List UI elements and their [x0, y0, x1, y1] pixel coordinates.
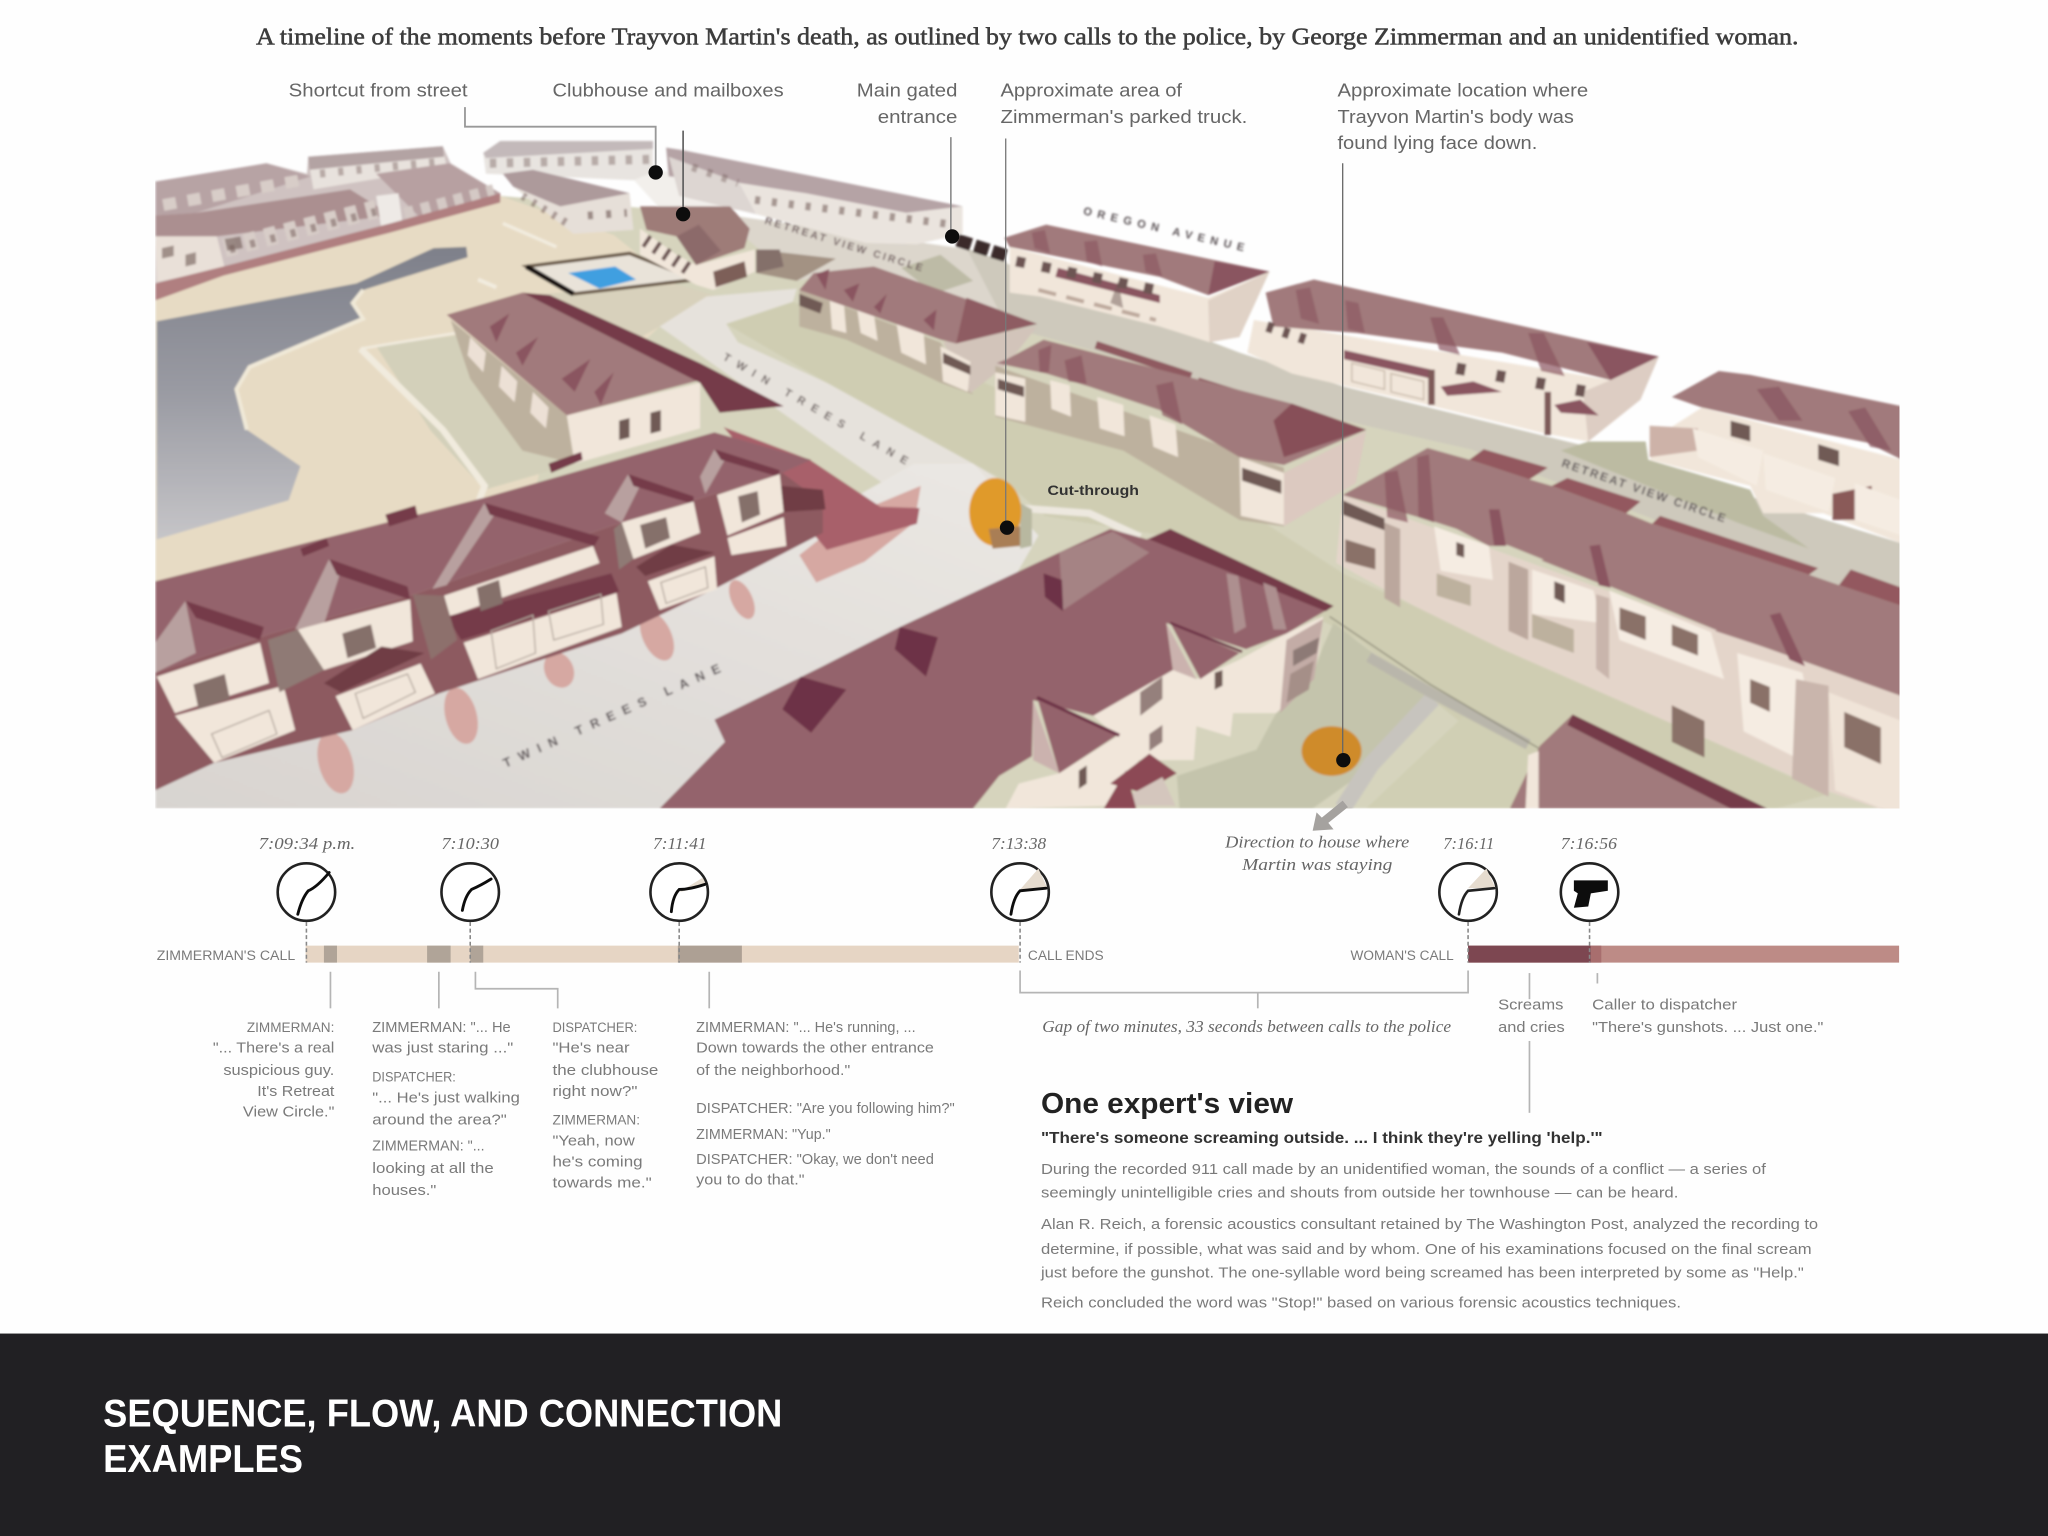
- callout: parked truck: Approximate area of: [1000, 80, 1183, 101]
- transcript column 3: DISPATCHER:: [552, 1020, 637, 1035]
- callout: main gated entrance: Main gated: [857, 80, 957, 101]
- direction note: Direction to house where: [1224, 833, 1409, 852]
- far back row near shortcut: [483, 141, 653, 234]
- timeline: [157, 833, 1899, 1199]
- transcript column 1: ZIMMERMAN:: [247, 1020, 334, 1035]
- footer band: [0, 1334, 2048, 1536]
- G white wall panels: [1434, 526, 1493, 580]
- lawn behind pool: [548, 285, 696, 336]
- title: A timeline of the moments before Trayvon Martin's death, as outlined by two calls to the police, by George Zimmerman and an unidentified woman.: [256, 23, 1799, 50]
- screams note: [1498, 997, 1565, 1036]
- quote: "There's someone screaming outside. ... I think they're yelling 'help.'": [1041, 1130, 1603, 1147]
- G porches and windows: [1343, 500, 1384, 530]
- transcript column 3: towards me.": [552, 1174, 652, 1191]
- windows and garage doors: [193, 674, 230, 709]
- body text: Alan R. Reich, a forensic acoustics consultant retained by The Washington Post, analyzed the recording to: [1041, 1216, 1818, 1233]
- icon: clock 7:16:11: [1439, 863, 1497, 921]
- callout: main gated entrance: entrance: [878, 106, 957, 127]
- transcript column 2: ZIMMERMAN: "... He: [372, 1019, 511, 1036]
- pool and frame: [526, 253, 696, 294]
- dormers: [155, 601, 196, 673]
- body text: [1040, 1161, 1818, 1311]
- transcript column 3: "Yeah, now: [552, 1132, 635, 1149]
- lake banks: [155, 196, 712, 588]
- direction note: [1224, 833, 1409, 874]
- parking strips: [1096, 345, 1902, 606]
- recessed: [268, 630, 324, 692]
- orange marker: truck area: [969, 478, 1032, 549]
- transcript column 1: View Circle.": [243, 1104, 334, 1121]
- lawn by lake: [378, 336, 543, 488]
- Twin Trees Lane road lower: [155, 464, 1038, 808]
- row: block E: [995, 340, 1366, 526]
- caller note: Caller to dispatcher: [1592, 997, 1737, 1014]
- icon: clock 7:13:38: [991, 863, 1049, 921]
- Retreat View Circle road: [967, 248, 1902, 614]
- screams note: and cries: [1498, 1019, 1565, 1036]
- transcript column 2: looking at all the: [372, 1160, 494, 1177]
- upper walls: [157, 643, 269, 713]
- big central roof block J: [660, 529, 1334, 808]
- callout: parked truck: [1000, 80, 1247, 535]
- timestamps: [259, 834, 1618, 853]
- gap note: Gap of two minutes, 33 seconds between calls to the police: [1042, 1017, 1451, 1036]
- lake: [157, 247, 468, 539]
- map street labels: TWIN TREES LANE: [721, 351, 917, 471]
- transcript column 3: "He's near: [552, 1040, 630, 1057]
- clubhouse: [640, 206, 836, 290]
- callout: main gated entrance: [857, 80, 959, 244]
- transcript column 4: you to do that.": [696, 1172, 805, 1189]
- garage walls: [175, 686, 295, 763]
- direction note: Martin was staying: [1241, 855, 1392, 874]
- arrow: direction to house: [1313, 801, 1348, 831]
- callout: parked truck: Zimmerman's parked truck.: [1000, 106, 1247, 127]
- transcript column 2: DISPATCHER:: [372, 1069, 456, 1084]
- Twin Trees Lane road upper: [660, 288, 996, 482]
- transcript column 4: [696, 1019, 955, 1189]
- row: block F2: [1247, 280, 1659, 441]
- distant houses, upper left: [155, 146, 500, 300]
- body text: Reich concluded the word was "Stop!" based on various forensic acoustics techniques.: [1041, 1294, 1681, 1311]
- J windows: [1140, 677, 1162, 716]
- transcript column 2: ZIMMERMAN: "...: [372, 1138, 485, 1155]
- timestamps: 7:09:34 p.m.: [259, 834, 355, 853]
- transcript column 2: houses.": [372, 1182, 436, 1199]
- transcript column 1: It's Retreat: [257, 1083, 335, 1100]
- transcript column 3: ZIMMERMAN:: [552, 1113, 640, 1128]
- bar labels: CALL ENDS: [1028, 948, 1104, 963]
- transcript column 2: around the area?": [372, 1112, 507, 1129]
- map callouts: [289, 80, 1588, 767]
- map street labels: TWIN TREES LANE: [501, 657, 730, 771]
- small white paths: [503, 223, 556, 247]
- cut-through label: Cut-through: [1048, 483, 1139, 498]
- timestamps: 7:11:41: [653, 834, 707, 853]
- transcript column 1: suspicious guy.: [223, 1062, 334, 1079]
- map street labels: RETREAT VIEW CIRCLE: [763, 216, 926, 275]
- icon: clock 7:10:30: [441, 863, 499, 921]
- screams note: Screams: [1498, 997, 1563, 1014]
- footer title: EXAMPLES: [103, 1438, 303, 1481]
- clock stems: [306, 922, 1590, 963]
- G dormers: [1445, 509, 1506, 546]
- garage roofs: [324, 647, 424, 692]
- panel: one expert's view: [1040, 1088, 1818, 1311]
- icon: clock 7:09:34: [278, 863, 335, 921]
- icon: gun: [1561, 863, 1618, 921]
- row: block F1: [1004, 225, 1270, 342]
- transcript column 2: [371, 1019, 520, 1199]
- orange marker: body location: [1302, 726, 1362, 776]
- footer title: [103, 1392, 782, 1481]
- caller note: [1592, 997, 1823, 1036]
- map street labels: OREGON AVENUE: [1082, 205, 1251, 255]
- transcript column 4: ZIMMERMAN: "Yup.": [696, 1126, 831, 1143]
- gable two: [1033, 700, 1059, 773]
- transcript column 4: DISPATCHER: "Are you following him?": [696, 1100, 955, 1117]
- callout: body location: [1336, 80, 1588, 767]
- transcript column 4: of the neighborhood.": [696, 1062, 850, 1079]
- row: block D: [799, 266, 1037, 394]
- transcript column 3: he's coming: [552, 1153, 643, 1170]
- transcript column 1: [213, 1020, 335, 1121]
- bar labels: [157, 948, 1454, 963]
- callout: shortcut from street: Shortcut from street: [289, 80, 468, 101]
- transcript column 3: the clubhouse: [552, 1062, 658, 1079]
- heading: One expert's view: [1041, 1088, 1294, 1120]
- row: block H bottom right: [1510, 714, 1767, 808]
- timestamps: 7:10:30: [441, 834, 499, 853]
- transcript column 3: right now?": [552, 1083, 637, 1100]
- map street labels: [501, 205, 1729, 771]
- ground: [502, 195, 1878, 808]
- row: block F3: [1650, 371, 1902, 543]
- transcript column 4: ZIMMERMAN: "... He's running, ...: [696, 1019, 916, 1036]
- body text: During the recorded 911 call made by an unidentified woman, the sounds of a conflict — a series of: [1041, 1161, 1767, 1178]
- woman call bar: [1468, 946, 1899, 963]
- callout: body location: Trayvon Martin's body was: [1337, 106, 1574, 127]
- shadow beyond Twin Trees house: [724, 427, 920, 550]
- callout: body location: found lying face down.: [1337, 132, 1537, 153]
- body text: just before the gunshot. The one-syllable word being screamed has been interpreted by some as "Help.": [1040, 1264, 1804, 1281]
- bar labels: WOMAN'S CALL: [1351, 948, 1454, 963]
- icon: clock 7:11:41: [650, 863, 708, 921]
- transcript column 4: Down towards the other entrance: [696, 1040, 934, 1057]
- transcript column 3: [552, 1020, 658, 1191]
- lawn beyond path: [1371, 723, 1524, 808]
- lawn inside the curve: [726, 302, 1829, 808]
- timestamps: 7:16:56: [1561, 834, 1618, 853]
- body area lawn: [1177, 623, 1430, 808]
- driveway shadows: [311, 486, 921, 797]
- gable one: [1166, 623, 1196, 679]
- callout: body location: Approximate location where: [1337, 80, 1588, 101]
- callout: clubhouse and mailboxes: Clubhouse and mailboxes: [552, 80, 784, 101]
- callout: clubhouse and mailboxes: [552, 80, 784, 221]
- side paths: [1020, 508, 1140, 537]
- caller note: "There's gunshots. ... Just one.": [1592, 1019, 1823, 1036]
- transcript column 4: DISPATCHER: "Okay, we don't need: [696, 1151, 934, 1168]
- map street labels: RETREAT VIEW CIRCLE: [1560, 457, 1729, 526]
- transcript column 2: was just staring ...": [371, 1040, 513, 1057]
- body text: determine, if possible, what was said and by whom. One of his examinations focused on the final scream: [1041, 1241, 1812, 1258]
- transcript column 1: "... There's a real: [213, 1040, 334, 1057]
- far row behind Retreat View Circle: [666, 148, 1007, 256]
- row: block G right: [1336, 448, 1902, 816]
- pale ground near clubhouse: [635, 171, 718, 206]
- light ground along upper Retreat View Circle: [740, 216, 1008, 308]
- big row K bottom left: [155, 432, 825, 790]
- leader lines under bars: [330, 970, 1597, 1113]
- footer title: SEQUENCE, FLOW, AND CONNECTION: [103, 1392, 782, 1435]
- transcript column 2: "... He's just walking: [372, 1089, 520, 1106]
- callout: shortcut from street: [289, 80, 663, 180]
- timestamps: 7:13:38: [991, 834, 1046, 853]
- row: block L by the lake: [447, 293, 784, 464]
- body text: seemingly unintelligible cries and shouts from outside her townhouse — can be heard.: [1041, 1185, 1678, 1202]
- timestamps: 7:16:11: [1443, 834, 1494, 853]
- Zimmerman call bar: [306, 946, 1019, 963]
- aerial map of the neighborhood: [155, 141, 1902, 816]
- bar labels: ZIMMERMAN'S CALL: [157, 948, 296, 963]
